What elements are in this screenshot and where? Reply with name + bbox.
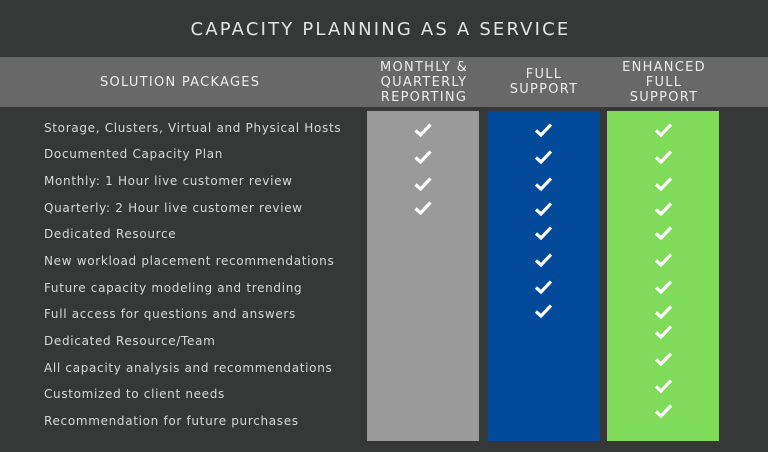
feature list: Future capacity modeling and trending — [44, 280, 302, 294]
heading: full support: SUPPORT — [510, 82, 578, 97]
heading: enhanced full support — [622, 60, 706, 105]
panel: green column — [607, 111, 719, 441]
feature list: Recommendation for future purchases — [44, 414, 299, 428]
heading: monthly and quarterly reporting: REPORTING — [381, 90, 467, 105]
heading: monthly and quarterly reporting: MONTHLY & — [380, 60, 468, 75]
heading: monthly and quarterly reporting — [380, 60, 468, 105]
feature list: Dedicated Resource/Team — [44, 334, 215, 348]
heading: enhanced full support: ENHANCED — [622, 60, 706, 75]
feature list: Monthly: 1 Hour live customer review — [44, 174, 293, 188]
title: CAPACITY PLANNING AS A SERVICE — [191, 19, 570, 40]
feature list: Full access for questions and answers — [44, 307, 296, 321]
heading: full support: FULL — [526, 67, 562, 82]
feature list: Dedicated Resource — [44, 227, 176, 241]
heading: enhanced full support: SUPPORT — [630, 90, 698, 105]
heading: full support — [510, 67, 578, 97]
feature list — [44, 120, 341, 428]
feature list: All capacity analysis and recommendations — [44, 360, 332, 374]
heading: solution packages: SOLUTION PACKAGES — [100, 75, 260, 90]
feature list: Quarterly: 2 Hour live customer review — [44, 200, 303, 214]
feature list: Storage, Clusters, Virtual and Physical Hosts — [44, 120, 341, 134]
feature list: Customized to client needs — [44, 387, 225, 401]
feature list: New workload placement recommendations — [44, 254, 334, 268]
panel: grey column — [367, 111, 479, 441]
header band — [0, 57, 768, 107]
heading: enhanced full support: FULL — [646, 75, 682, 90]
heading: monthly and quarterly reporting: QUARTERLY — [381, 75, 467, 90]
feature list: Documented Capacity Plan — [44, 147, 223, 161]
panel: blue column — [488, 111, 600, 441]
